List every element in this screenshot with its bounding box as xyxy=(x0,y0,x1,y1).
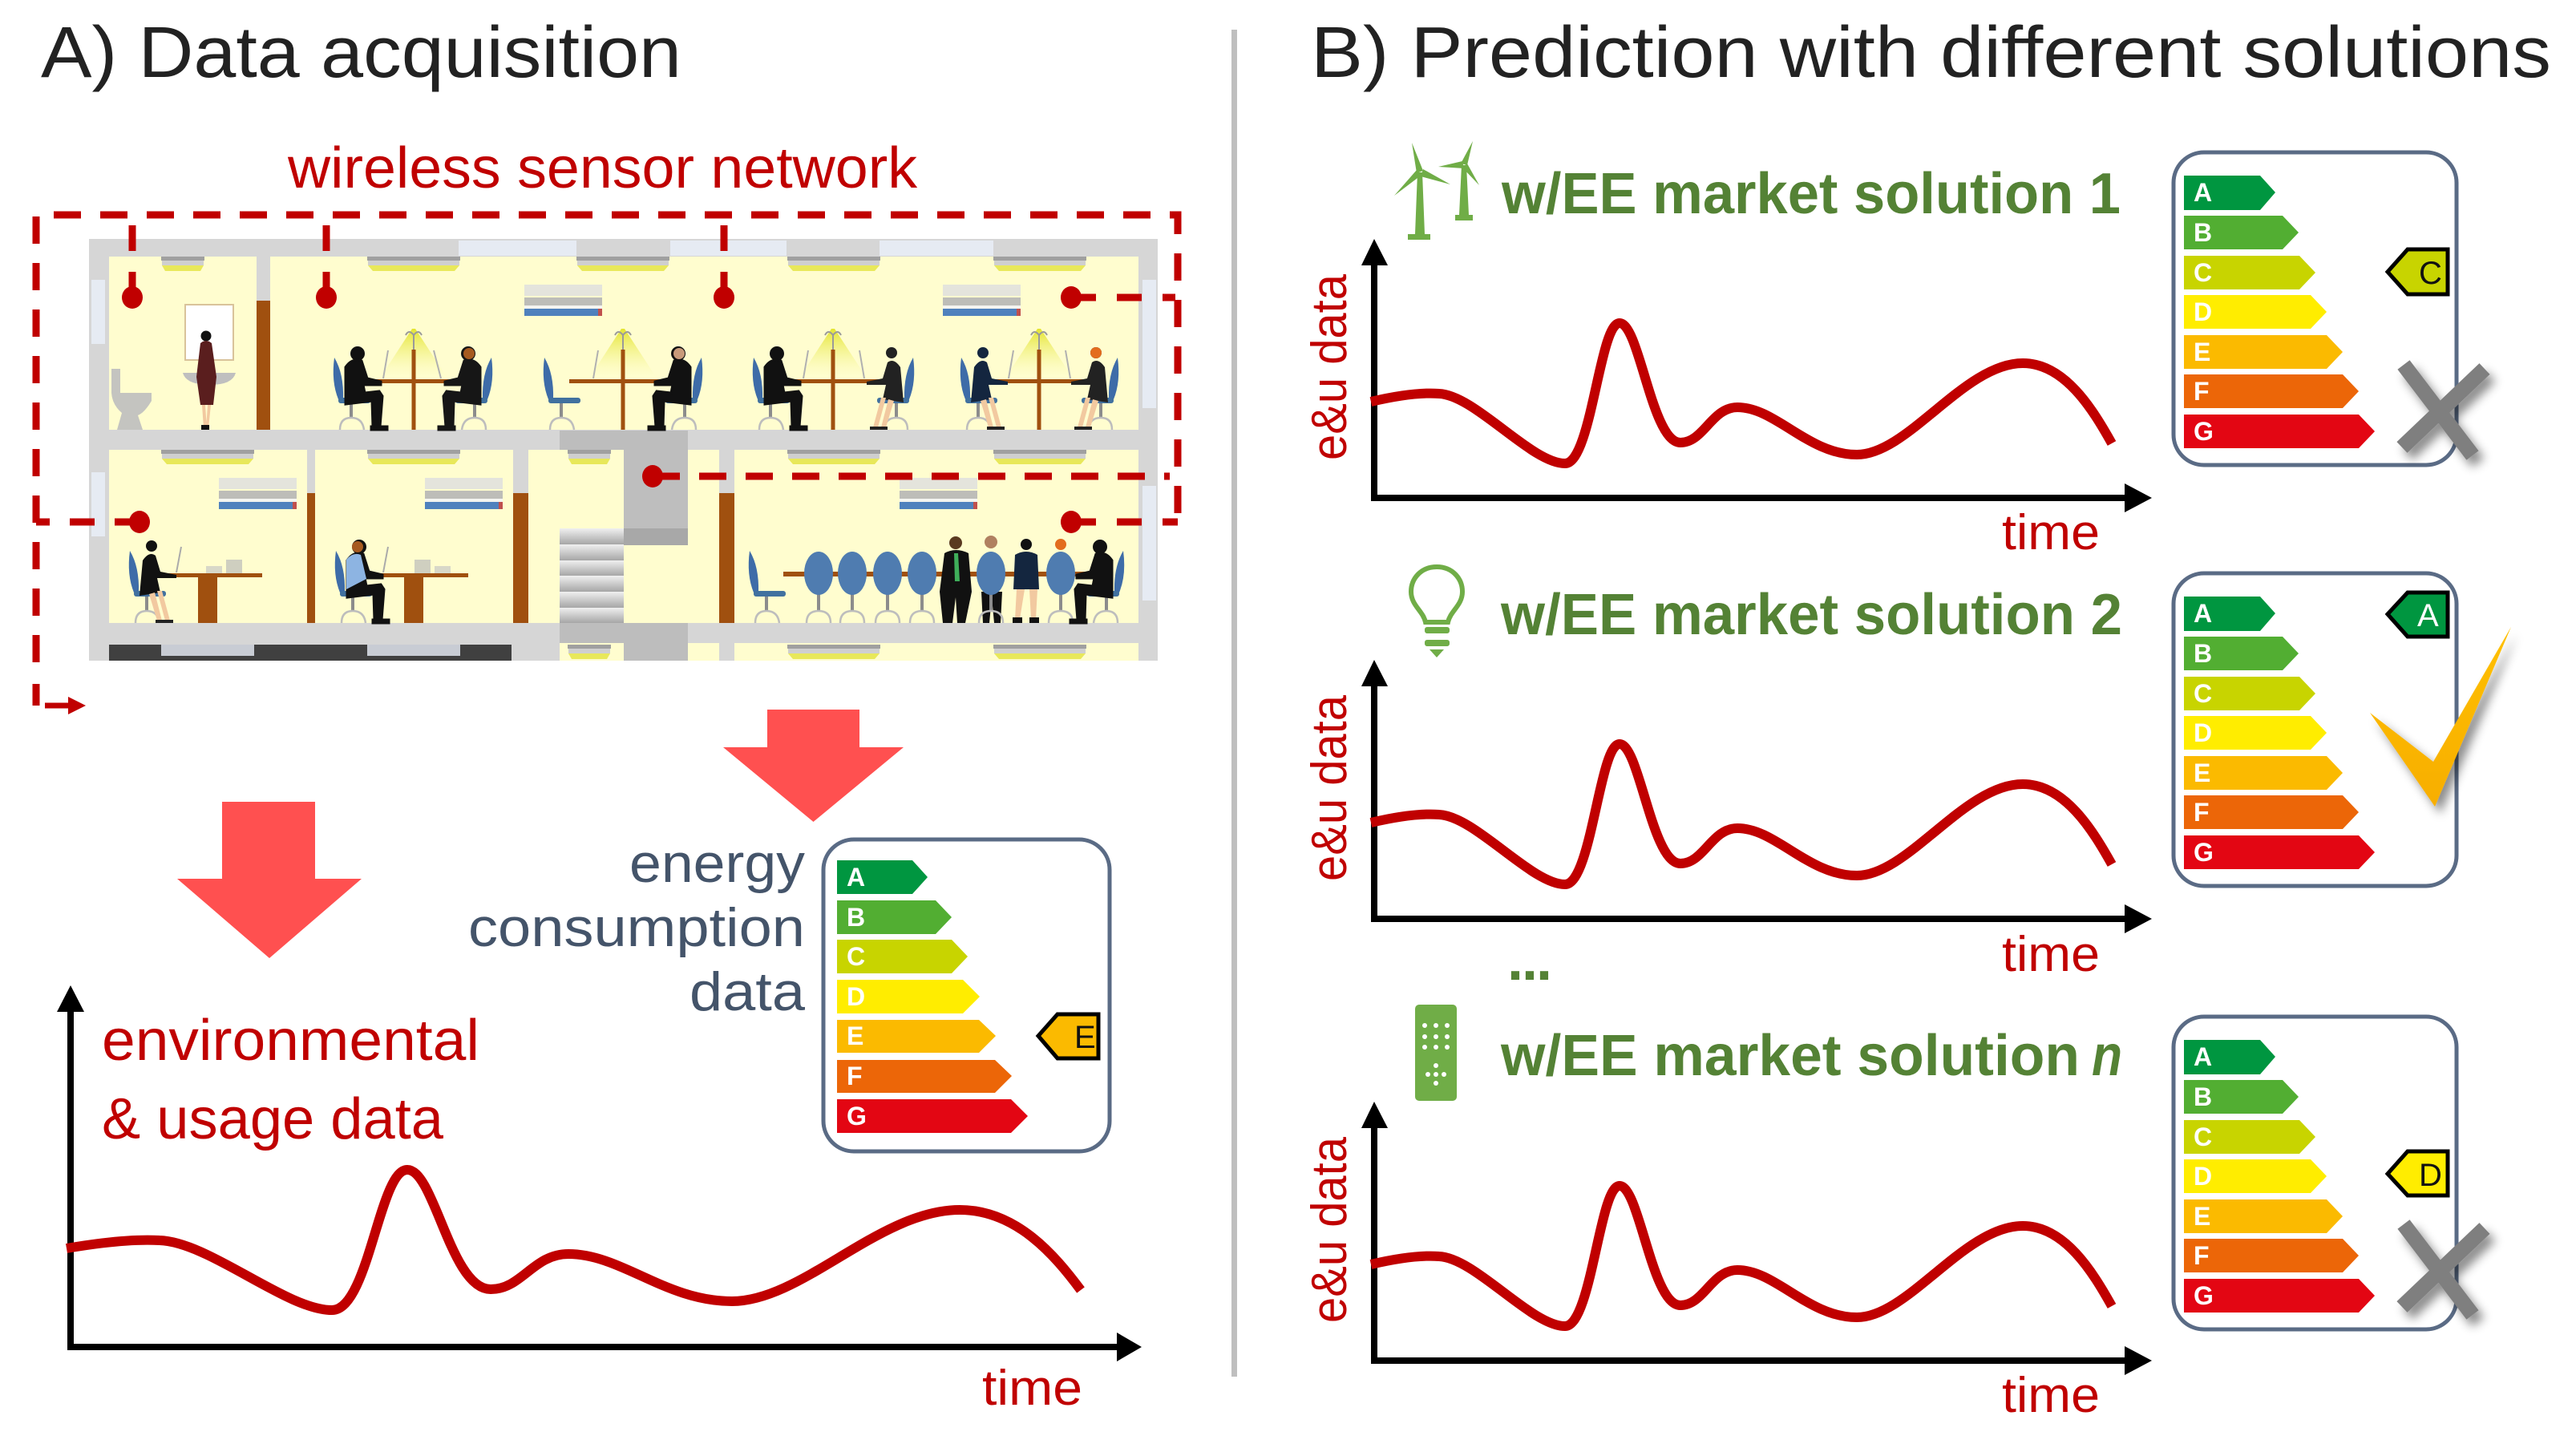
chart: solution 2 xyxy=(1302,660,2152,982)
lower floor single desks xyxy=(129,540,468,623)
energy label: rating E: D xyxy=(847,982,865,1011)
y axis label: e&u data xyxy=(1302,695,1357,881)
title: solution 1: w/EE market solution 1 xyxy=(1501,162,2121,226)
energy label: rating C, rejected: D xyxy=(2194,297,2212,326)
washroom xyxy=(111,305,236,430)
energy label: rating D, rejected: D xyxy=(2194,1162,2212,1191)
energy label: rating D, rejected: E xyxy=(2194,1202,2210,1231)
meeting room xyxy=(749,536,1124,623)
title: solution n: w/EE market solution xyxy=(1500,1024,2080,1088)
series label xyxy=(102,1009,479,1151)
icon: rejected cross 2 xyxy=(2402,1224,2485,1315)
energy label: rating A, accepted: B xyxy=(2194,639,2212,668)
chart axes xyxy=(1361,239,2152,512)
data curve xyxy=(67,1170,1081,1310)
icon: wind turbines xyxy=(1394,141,1479,240)
wall air-conditioning units xyxy=(219,285,1021,509)
energy label: rating C, rejected: C xyxy=(2194,258,2212,287)
energy label: rating C, rejected xyxy=(2174,152,2457,465)
stairwell xyxy=(560,431,688,661)
data curve xyxy=(1371,323,2112,463)
energy label: rating C, rejected: E xyxy=(2194,338,2210,366)
energy label: rating D, rejected: G xyxy=(2194,1281,2214,1310)
heading: B) Prediction with different solutions: B) Prediction with different solutions xyxy=(1311,13,2551,93)
energy label: rating D, rejected: F xyxy=(2194,1241,2210,1270)
energy label: rating E: E xyxy=(1074,1020,1096,1055)
text: energy consumption data xyxy=(468,833,805,1022)
vertical panel divider xyxy=(1231,30,1237,1377)
arrow: building to environmental and usage data xyxy=(177,802,362,958)
title: solution 2: w/EE market solution 2 xyxy=(1500,583,2122,647)
x axis label: time xyxy=(2002,927,2100,982)
text: energy consumption data: data xyxy=(689,961,805,1022)
icon: light bulb xyxy=(1411,567,1462,657)
icon: accepted check mark xyxy=(2370,627,2511,807)
label: wireless sensor network: wireless sensor network xyxy=(287,136,918,200)
energy label: rating D, rejected: D xyxy=(2419,1158,2442,1193)
icon: rejected cross 1 xyxy=(2402,365,2485,455)
heading: A) Data acquisition: A) Data acquisition xyxy=(41,13,681,93)
wireless sensor network: dashed links and sensors xyxy=(36,215,1178,714)
x axis label: time xyxy=(2002,505,2100,560)
ceiling lights xyxy=(161,257,1086,659)
energy label: rating E: E xyxy=(847,1021,863,1050)
text: energy consumption data: consumption xyxy=(468,897,805,958)
energy label: rating E: C xyxy=(847,942,865,971)
icon: remote control xyxy=(1415,1005,1457,1101)
x axis label: time xyxy=(982,1361,1082,1416)
upper floor desks with lamps xyxy=(362,329,1094,430)
ellipsis between solutions: ... xyxy=(1507,928,1552,993)
building cross-section illustration xyxy=(89,239,1158,661)
energy label: rating E: G xyxy=(847,1102,867,1131)
data curve xyxy=(1371,744,2112,884)
energy label: rating A, accepted: D xyxy=(2194,718,2212,747)
energy label: rating A, accepted xyxy=(2174,573,2457,886)
energy label: rating C, rejected: C xyxy=(2419,256,2442,291)
energy label: rating A, accepted: A xyxy=(2417,598,2439,633)
y axis label: e&u data xyxy=(1302,1137,1357,1323)
energy label: rating A, accepted: F xyxy=(2194,798,2210,827)
chart: solution 1 xyxy=(1302,239,2152,560)
chart axes xyxy=(1361,660,2152,933)
energy label: rating E: A xyxy=(847,863,865,892)
energy label: rating D, rejected: B xyxy=(2194,1082,2212,1111)
energy label: rating C, rejected: B xyxy=(2194,218,2212,247)
text: energy consumption data: energy xyxy=(629,833,805,894)
energy label: rating E: F xyxy=(847,1062,863,1090)
chart: solution n xyxy=(1302,1102,2152,1423)
x axis label: time xyxy=(2002,1368,2100,1423)
energy label: rating A, accepted: C xyxy=(2194,679,2212,708)
energy label: rating E: B xyxy=(847,903,865,932)
energy label: rating D, rejected xyxy=(2174,1017,2457,1329)
title: solution n: n xyxy=(2092,1024,2122,1088)
chart axes xyxy=(1361,1102,2152,1375)
series label: environmental xyxy=(102,1009,479,1073)
energy label: rating A, accepted: E xyxy=(2194,758,2210,787)
y axis label: e&u data xyxy=(1302,274,1357,460)
energy label: rating D, rejected: C xyxy=(2194,1122,2212,1151)
energy label: rating A, accepted: G xyxy=(2194,838,2214,867)
energy label: rating C, rejected: F xyxy=(2194,377,2210,406)
chart axes xyxy=(57,985,1142,1361)
data curve xyxy=(1371,1186,2112,1326)
energy label: rating C, rejected: G xyxy=(2194,417,2214,446)
energy label: rating E xyxy=(823,839,1110,1151)
energy label: rating C, rejected: A xyxy=(2194,178,2212,207)
upper floor workers xyxy=(334,347,1118,430)
energy label: rating A, accepted: A xyxy=(2194,599,2212,628)
chart: environmental and usage data xyxy=(57,985,1142,1416)
series label: & usage data xyxy=(102,1087,444,1151)
arrow: building to energy consumption data xyxy=(723,710,904,822)
energy label: rating D, rejected: A xyxy=(2194,1042,2212,1071)
